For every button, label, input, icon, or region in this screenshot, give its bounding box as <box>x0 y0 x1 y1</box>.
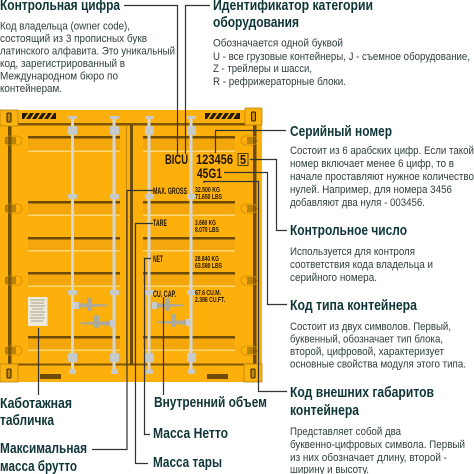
text: equipment category identifier: Z - трейлеры и шасси, <box>213 63 312 75</box>
hazard stripes <box>22 113 240 119</box>
container codes: 32.500 KG <box>195 187 220 194</box>
label: maximum gross mass: Максимальная <box>0 441 87 457</box>
text: external dimensions code: Код внешних габаритов <box>290 385 434 401</box>
corner castings <box>0 108 262 382</box>
container codes: 67.6 CU.M. <box>195 290 221 297</box>
hinges <box>5 136 257 355</box>
door panels <box>28 136 235 351</box>
label: cabotage plate: табличка <box>0 413 55 429</box>
label: tare mass: Масса тары <box>153 455 222 471</box>
container codes: 3.660 KG <box>195 220 216 227</box>
text: check digit: код, зарегистрированный в <box>0 58 125 70</box>
text: check digit: Код владельца (owner code), <box>0 20 130 32</box>
leader lines <box>38 6 287 464</box>
label: maximum gross mass <box>0 441 87 474</box>
text: serial number: нулей. Например, для номера 3456 <box>290 184 452 196</box>
text: control number <box>290 223 433 284</box>
container codes: TARE <box>153 218 167 229</box>
text: control number: Контрольное число <box>290 223 407 239</box>
text: check digit: латинского алфавита. Это уникальный <box>0 46 175 58</box>
container codes: CU. CAP. <box>153 289 176 300</box>
text: equipment category identifier: оборудования <box>213 15 299 31</box>
container codes: 123456 <box>196 151 233 167</box>
text: container type code: Код типа контейнера <box>290 298 418 314</box>
door frame verticals <box>8 125 256 365</box>
label: cabotage plate <box>0 396 72 429</box>
container codes <box>153 151 248 304</box>
text: external dimensions code <box>290 385 465 474</box>
label: net mass: Масса Нетто <box>153 426 228 442</box>
container doors <box>0 108 262 382</box>
container codes: BICU <box>165 151 188 167</box>
locking rods <box>68 116 196 374</box>
bottom plates <box>40 374 228 379</box>
text: container type code: буквенный, обозначает тип блока, <box>290 334 443 346</box>
text: control number: Используется для контроля <box>290 246 415 258</box>
container codes: 71.650 LBS <box>195 194 222 201</box>
container codes: 5 <box>240 152 246 167</box>
text: serial number: Серийный номер <box>290 124 392 140</box>
top rail line <box>18 123 256 126</box>
text: container type code <box>290 298 466 370</box>
text: container type code: второй, цифровой, характеризует <box>290 346 444 358</box>
text: equipment category identifier: Обозначается одной буквой <box>213 38 343 50</box>
text: external dimensions code: Представляет собой два <box>290 426 402 438</box>
text: external dimensions code: контейнера <box>290 403 360 419</box>
cabotage plate <box>28 297 48 326</box>
text: serial number: номер включает менее 6 цифр, то в <box>290 158 454 170</box>
text: external dimensions code: из них обозначает длину, второй - <box>290 452 447 464</box>
text: control number: серийного номера. <box>290 272 377 284</box>
text: container type code: Состоит из двух символов. Первый, <box>290 321 451 333</box>
text: serial number: добавляют два нуля - 003456. <box>290 197 425 209</box>
container codes: 63.580 LBS <box>195 263 222 270</box>
text: serial number <box>290 124 474 209</box>
container codes: MAX. GROSS <box>153 186 187 197</box>
text: check digit: состоящий из 3 прописных букв <box>0 33 147 45</box>
label: cabotage plate: Каботажная <box>0 396 72 412</box>
container codes: 28.840 KG <box>195 256 219 263</box>
door handles <box>74 298 191 328</box>
container codes: NET <box>153 254 163 265</box>
text: check digit: контейнерам. <box>0 83 62 95</box>
text: equipment category identifier <box>213 0 470 88</box>
container codes: 45G1 <box>197 165 222 181</box>
container codes: 8.070 LBS <box>195 227 219 234</box>
bottom rail line <box>8 364 256 366</box>
text: check digit <box>0 0 175 95</box>
text: equipment category identifier: R - рефрижераторные блоки. <box>213 76 346 88</box>
text: control number: соответствия кода владельца и <box>290 259 433 271</box>
label: internal volume: Внутренний объем <box>154 395 267 411</box>
container codes: 2.386 CU.FT. <box>195 297 225 304</box>
text: check digit: Международном бюро по <box>0 70 118 82</box>
